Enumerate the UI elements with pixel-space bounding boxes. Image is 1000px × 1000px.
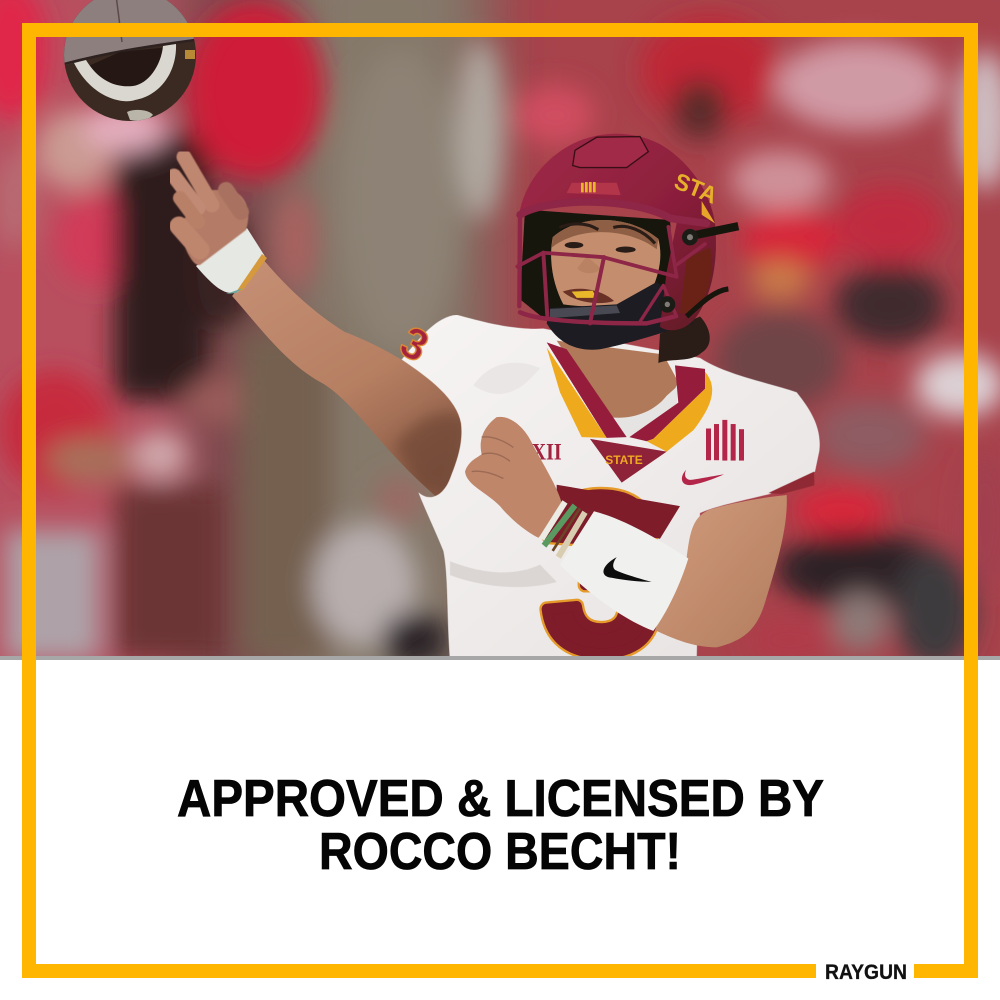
neck	[556, 340, 677, 418]
collar left yellow	[547, 348, 607, 438]
collar right maroon	[629, 365, 705, 441]
helmet decal stem	[702, 201, 715, 223]
headline line 2: ROCCO BECHT!	[319, 823, 681, 881]
sleeve stripes patch	[706, 420, 744, 461]
face	[551, 220, 660, 307]
throwing hand	[174, 157, 248, 265]
nose	[578, 258, 600, 273]
helmet side panel	[680, 248, 712, 313]
jersey number: 3	[542, 448, 662, 699]
helmet interior	[520, 210, 677, 323]
chin cup highlight	[550, 305, 620, 318]
undershirt	[610, 385, 678, 437]
eyebrows	[559, 224, 655, 243]
hair	[658, 316, 710, 363]
helmet decal: STA	[671, 167, 721, 209]
forehead shadow	[552, 220, 658, 249]
player: jersey, arm, helmet	[392, 134, 820, 699]
blurred crowd background	[0, 0, 1000, 720]
wristband on throwing arm	[196, 228, 267, 294]
helmet stripe badge	[567, 182, 621, 195]
photo bottom shadow	[0, 656, 1000, 660]
chest V panel	[590, 439, 667, 483]
collar left maroon	[547, 342, 627, 438]
mouthguard	[572, 291, 597, 298]
headline line 1: APPROVED & LICENSED BY	[177, 770, 824, 828]
chest logo: STATE	[605, 453, 643, 467]
helmet top vent	[573, 137, 648, 168]
bracelets	[542, 502, 585, 557]
brand wordmark: RAYGUN	[825, 961, 907, 984]
photo: quarterback throwing a football	[0, 0, 1000, 720]
helmet shell	[519, 134, 716, 330]
top helmet strap and clip	[682, 226, 738, 245]
jersey number: 3	[542, 448, 662, 699]
shoulder number: 3	[392, 316, 436, 372]
mouth	[563, 289, 614, 303]
jersey number	[539, 484, 680, 656]
sleeve cuff	[768, 472, 814, 494]
headline	[177, 770, 824, 881]
lower helmet strap and clip	[659, 289, 728, 316]
fist	[465, 417, 562, 538]
swoosh red	[682, 470, 724, 485]
collar right yellow	[647, 372, 712, 452]
conference patch: XII	[532, 438, 562, 465]
jersey fold shading	[473, 363, 540, 394]
facemask	[517, 202, 707, 323]
throwing arm	[232, 258, 475, 505]
wrist sleeve	[560, 511, 688, 631]
jersey	[402, 315, 820, 660]
forearm	[655, 495, 787, 647]
chin cup	[547, 282, 693, 350]
football	[60, 0, 200, 125]
sleeve swoosh	[603, 557, 652, 582]
fist finger lines	[472, 437, 513, 478]
eyes	[565, 242, 636, 253]
